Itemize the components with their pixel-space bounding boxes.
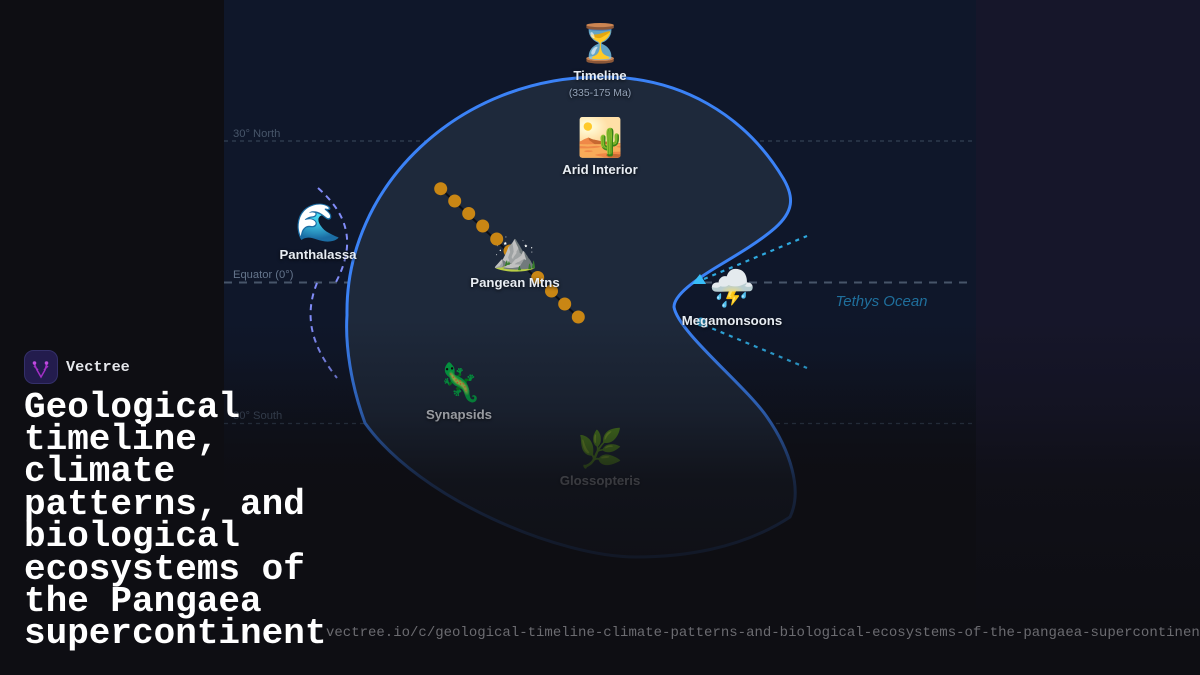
icon: wave: 🌊 (295, 202, 341, 245)
title (24, 386, 326, 654)
label: Timeline: Timeline (573, 68, 627, 83)
monsoon arrows (692, 236, 807, 368)
latitude line: 30 north: 30° North (233, 128, 280, 140)
continent: Pangaea (347, 77, 795, 557)
left fade overlay (0, 0, 224, 675)
map panel (224, 0, 976, 500)
icon: herb: 🌿 (577, 428, 623, 471)
label: date range: (335-175 Ma) (569, 88, 631, 99)
icon: lizard: 🦎 (436, 362, 482, 405)
title: timeline, (24, 419, 218, 460)
title: ecosystems of (24, 549, 305, 590)
brand name: Vectree (66, 358, 130, 376)
label: Tethys Ocean: Tethys Ocean (836, 293, 928, 310)
icon: mountain: ⛰️ (492, 231, 538, 274)
latitude line: 30 south: 30° South (233, 410, 282, 422)
label: Arid Interior: Arid Interior (562, 162, 638, 177)
title: climate (24, 451, 175, 492)
label: Synapsids: Synapsids (426, 407, 492, 422)
label: Pangean Mtns: Pangean Mtns (470, 275, 560, 290)
label: Glossopteris: Glossopteris (560, 473, 640, 488)
title: Geological (24, 386, 240, 428)
icon: hourglass: ⏳ (577, 23, 623, 66)
brand (24, 350, 130, 384)
icon: storm: ⛈️ (709, 268, 755, 311)
mountain range line (434, 182, 585, 324)
label: Panthalassa: Panthalassa (280, 247, 356, 262)
title: biological (24, 516, 240, 557)
source url: vectree.io/c/geological-timeline-climate-patterns-and-biological-ecosystems-of-the-pangaea-supercontinent (326, 625, 1200, 641)
ocean current arcs (311, 188, 347, 378)
title: patterns, and (24, 484, 305, 525)
bottom fade overlay (0, 320, 1200, 675)
right background panel (976, 0, 1200, 675)
icon: desert: 🏜️ (577, 117, 623, 160)
icon: Vectree logo (24, 350, 58, 384)
label: Megamonsoons: Megamonsoons (682, 313, 782, 328)
title: supercontinent (24, 613, 326, 654)
latitude line: equator: Equator (0°) (233, 269, 294, 281)
title: the Pangaea (24, 581, 262, 622)
